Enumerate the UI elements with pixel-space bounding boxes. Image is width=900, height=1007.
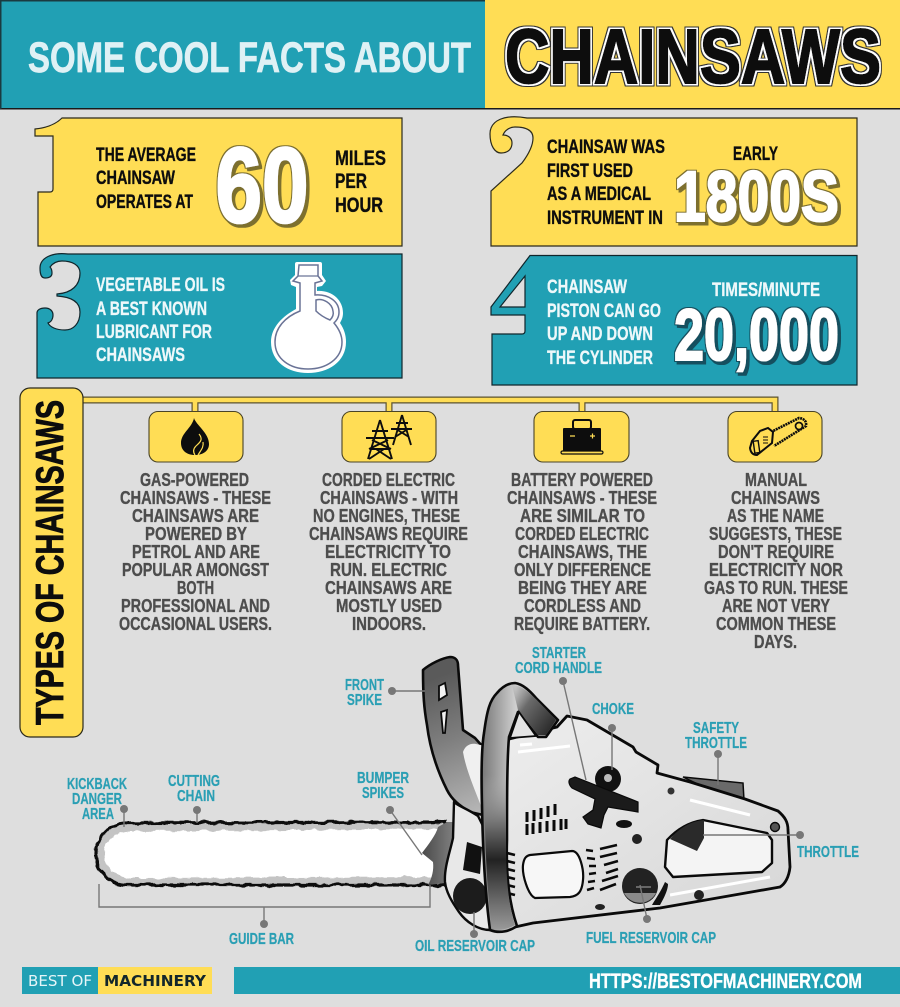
handle opening (665, 820, 772, 877)
labels: chainsaw parts: DANGER (72, 791, 122, 808)
fact 4 text: UP AND DOWN (547, 324, 653, 345)
fact 2 number: 1800S (674, 158, 839, 237)
connector fill (83, 400, 775, 412)
fact 4 times per minute label: TIMES/MINUTE (712, 280, 820, 301)
labels: chainsaw parts: FUEL RESERVOIR CAP (586, 930, 716, 947)
text block: manual: SUGGESTS, THESE (709, 524, 842, 544)
pin: choke (608, 724, 616, 770)
pin: throttle (703, 831, 804, 839)
labels: chainsaw parts: OIL RESERVOIR CAP (415, 938, 535, 955)
text block: manual (704, 470, 848, 652)
labels: chainsaw parts: CUTTING (168, 773, 220, 790)
labels: chainsaw parts: SAFETY (693, 720, 739, 737)
labels: chainsaw parts: SPIKE (347, 692, 382, 709)
body slot (616, 820, 632, 828)
labels: chainsaw parts: SPIKES (362, 785, 404, 802)
body dot (668, 788, 674, 794)
starter cord handle (569, 777, 638, 828)
panel: fact 1 (35, 118, 402, 246)
text block: manual: DON'T REQUIRE (718, 542, 834, 562)
text block: manual: ELECTRICITY NOR (709, 560, 843, 580)
labels: chainsaw parts: CHAIN (177, 788, 215, 805)
text block: corded electric: ELECTRICITY TO (325, 542, 451, 562)
fuel cap recess (652, 882, 668, 905)
logo: best of machinery: BEST OF (28, 972, 92, 990)
icon box: battery (534, 412, 629, 462)
body plug (595, 904, 605, 910)
header banner (0, 0, 900, 110)
tube top shading (512, 685, 556, 735)
text block: gas-powered: BOTH (177, 578, 214, 598)
panel: fact 4 (491, 256, 857, 385)
labels: chainsaw parts: THROTTLE (797, 844, 859, 861)
engine plate (463, 842, 482, 874)
body bolt (632, 834, 642, 844)
text block: corded electric: CHAINSAWS REQUIRE (309, 524, 468, 544)
icon: oil bottle (271, 262, 346, 373)
labels: chainsaw parts: FRONT (345, 677, 384, 694)
text block: gas-powered: CHAINSAWS ARE (132, 506, 259, 526)
vents lower (507, 845, 618, 895)
logo: best of machinery (22, 967, 212, 994)
title: some cool facts about: SOME COOL FACTS ABOUT (28, 34, 471, 82)
tube opening (510, 712, 536, 738)
fact 2 text (547, 137, 665, 229)
labels: chainsaw parts: STARTER (532, 645, 586, 662)
fact 3 text: CHAINSAWS (96, 345, 185, 366)
text block: battery powered: BEING THEY ARE (518, 578, 647, 598)
side window (523, 851, 583, 898)
fact 2 text: AS A MEDICAL (547, 184, 651, 205)
text block: battery powered: CHAINSAWS - THESE (507, 488, 657, 508)
text block: manual: ARE NOT VERY (722, 596, 830, 616)
labels: chainsaw parts: THROTTLE (685, 735, 747, 752)
fact 2 text: CHAINSAW WAS (547, 137, 665, 158)
fact 1 number: 60 (216, 125, 308, 245)
text block: manual: DAYS. (754, 632, 797, 652)
text block: corded electric: NO ENGINES, THESE (313, 506, 460, 526)
fact 4 text: PISTON CAN GO (547, 301, 661, 322)
fact 3 text: A BEST KNOWN (96, 299, 207, 320)
pin: fuel cap (640, 885, 651, 923)
fact 1 text: CHAINSAW (96, 168, 175, 189)
fact 1 text: THE AVERAGE (96, 145, 196, 166)
text block: gas-powered (119, 470, 272, 634)
text block: battery powered: ONLY DIFFERENCE (514, 560, 651, 580)
fact 3 text: VEGETABLE OIL IS (96, 275, 225, 296)
text block: battery powered (507, 470, 657, 634)
text block: corded electric: CORDED ELECTRIC (322, 470, 455, 490)
text block: manual: GAS TO RUN. THESE (704, 578, 848, 598)
text block: battery powered: CORDED ELECTRIC (515, 524, 649, 544)
guard slots (439, 683, 447, 733)
text block: gas-powered: POPULAR AMONGST (122, 560, 269, 580)
text block: manual: CHAINSAWS (731, 488, 820, 508)
panel: types of chainsaws tab (20, 388, 83, 737)
pin: kickback (120, 805, 128, 827)
text block: gas-powered: GAS-POWERED (140, 470, 249, 490)
text block: gas-powered: PROFESSIONAL AND (121, 596, 270, 616)
fact 4 text: CHAINSAW (547, 277, 627, 298)
footer url bar (234, 967, 900, 994)
labels: chainsaw parts: CHOKE (592, 701, 634, 718)
logo: best of machinery: MACHINERY (104, 972, 207, 990)
rear screw (770, 822, 780, 832)
text block: manual: MANUAL (745, 470, 807, 490)
text block: gas-powered: PETROL AND ARE (132, 542, 260, 562)
icon box: gas flame (149, 412, 243, 462)
text block: gas-powered: POWERED BY (145, 524, 247, 544)
text block: battery powered: REQUIRE BATTERY. (514, 614, 650, 634)
fact 4 text: THE CYLINDER (547, 348, 653, 369)
text block: corded electric: INDOORS. (352, 614, 426, 634)
fact 4 text (547, 277, 661, 369)
main tube handle (482, 683, 558, 932)
front guard (423, 657, 483, 815)
fact 1 text (96, 145, 196, 213)
text block: manual: AS THE NAME (727, 506, 824, 526)
fact 2 early label: EARLY (733, 144, 778, 165)
pin: cutting chain (193, 806, 201, 823)
fact 1 unit: HOUR (335, 194, 383, 217)
guide bar (96, 822, 445, 885)
pin: bumper spikes (386, 806, 422, 855)
fact 1 unit (335, 147, 386, 217)
tab heading: TYPES OF CHAINSAWS (29, 400, 72, 725)
fuel reservoir cap (622, 868, 658, 904)
icon box: manual chainsaw (728, 412, 822, 462)
pin: front spike (388, 687, 425, 695)
body screw (694, 890, 704, 900)
main body (488, 716, 790, 927)
panel: fact 3 (37, 254, 402, 378)
text block: battery powered: BATTERY POWERED (511, 470, 653, 490)
throttle safety (683, 777, 744, 800)
text block: corded electric (309, 470, 468, 634)
pin: oil cap (470, 912, 478, 938)
text block: corded electric: MOSTLY USED (336, 596, 442, 616)
fact 3 text: LUBRICANT FOR (96, 322, 212, 343)
body highlights (518, 744, 770, 895)
text block: battery powered: CHAINSAWS, THE (518, 542, 647, 562)
text block: corded electric: CHAINSAWS ARE (325, 578, 452, 598)
labels: chainsaw parts: AREA (82, 806, 114, 823)
vents upper (527, 804, 566, 835)
labels: chainsaw parts: BUMPER (357, 770, 409, 787)
guard inner wedge (463, 744, 485, 806)
icon box: power pylons (342, 412, 436, 462)
pin: safety throttle (714, 750, 722, 785)
labels: chainsaw parts: CORD HANDLE (515, 660, 602, 677)
bar mount (422, 822, 460, 885)
text block: battery powered: ARE SIMILAR TO (520, 506, 645, 526)
text block: gas-powered: OCCASIONAL USERS. (119, 614, 272, 634)
oil reservoir cap (453, 878, 487, 914)
text block: battery powered: CORDLESS AND (524, 596, 641, 616)
chainsaw illustration (96, 657, 804, 938)
pin: starter (559, 677, 586, 780)
connector lines (83, 400, 775, 412)
labels: chainsaw parts: KICKBACK (67, 776, 128, 793)
text block: corded electric: CHAINSAWS - WITH (320, 488, 458, 508)
fact 1 unit: PER (335, 170, 367, 193)
fact 1 text: OPERATES AT (96, 192, 193, 213)
labels: chainsaw parts (67, 645, 859, 955)
fact 4 number: 20,000 (674, 295, 839, 376)
text block: corded electric: RUN. ELECTRIC (330, 560, 447, 580)
fact 2 text: INSTRUMENT IN (547, 208, 663, 229)
guide bar bracket (99, 884, 430, 928)
trigger (670, 820, 704, 851)
tube shading (484, 775, 515, 929)
text block: manual: COMMON THESE (716, 614, 836, 634)
fact 2 text: FIRST USED (547, 161, 633, 182)
fact 1 unit: MILES (335, 147, 386, 170)
panel: fact 2 (490, 117, 857, 246)
left housing (445, 802, 490, 930)
fact 3 text (96, 275, 225, 366)
choke (595, 766, 621, 792)
text block: gas-powered: CHAINSAWS - THESE (120, 488, 271, 508)
choke center (604, 774, 612, 782)
labels: chainsaw parts: GUIDE BAR (229, 931, 294, 948)
